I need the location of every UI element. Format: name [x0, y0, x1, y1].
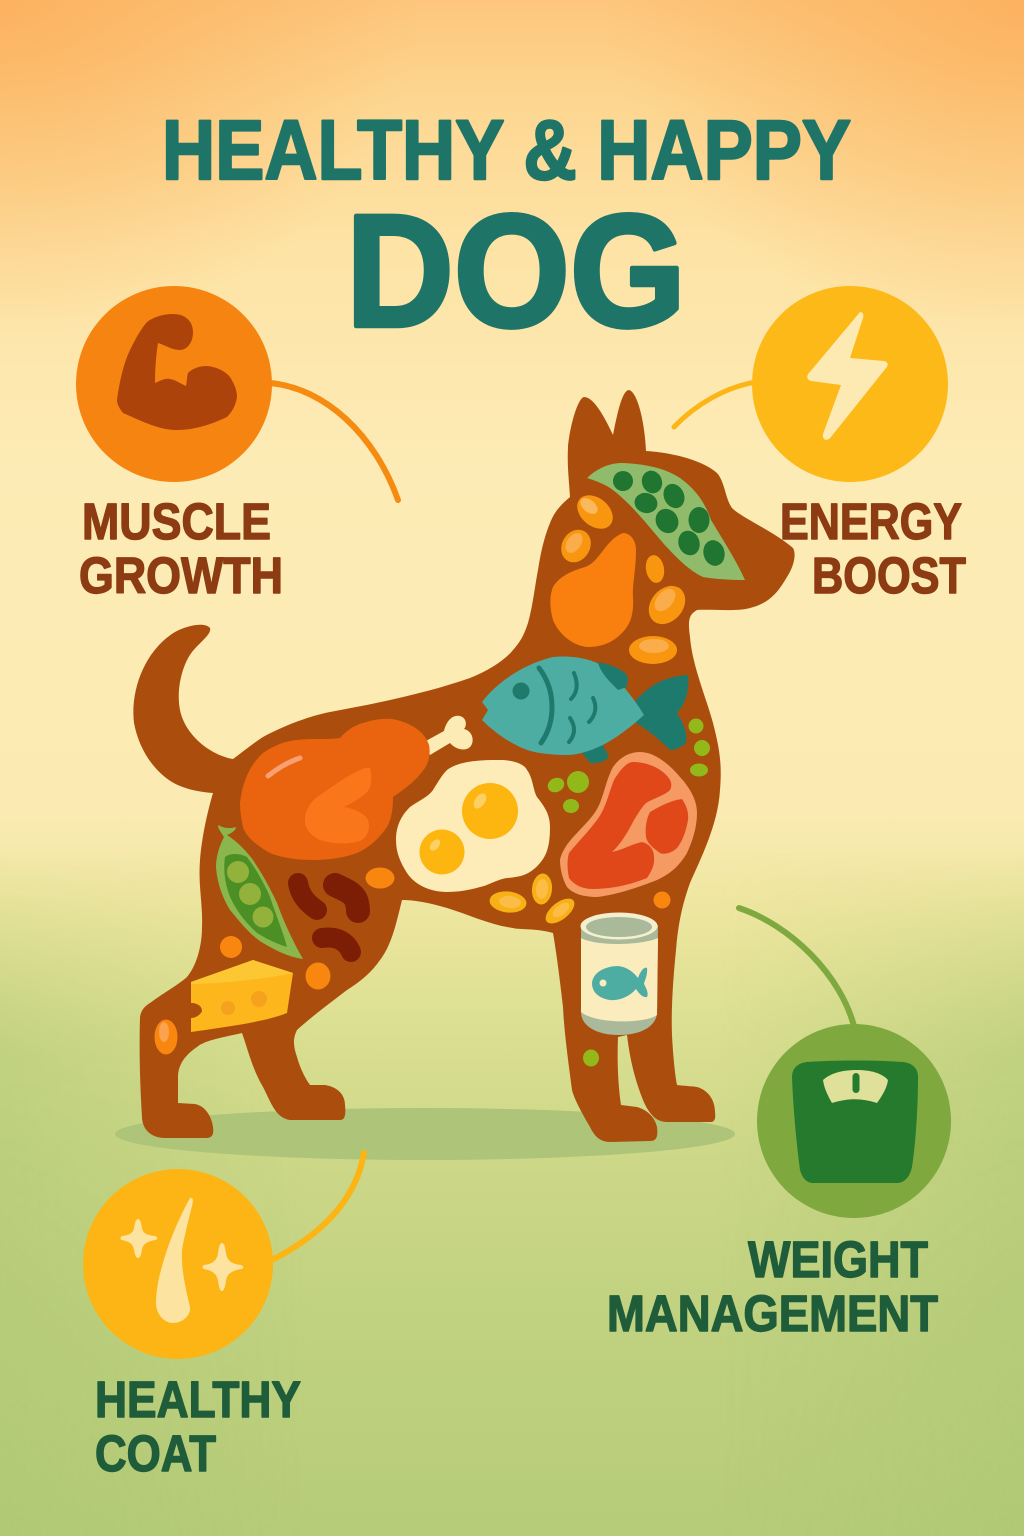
yellow kibble, belly: [489, 873, 670, 928]
steak: [560, 752, 697, 897]
orange pieces, rear: [154, 868, 394, 1054]
green pea pod, rear: [216, 825, 303, 959]
chicken drumstick: [240, 716, 473, 860]
green dots, chest: [545, 718, 710, 813]
icon: lightning bolt: [807, 312, 888, 440]
fried egg: [396, 760, 550, 892]
dog with food inside: [133, 390, 795, 1142]
label: ENERGY: [780, 493, 962, 550]
icon circle: [83, 1169, 273, 1359]
connector: [739, 908, 855, 1030]
kidney beans: [298, 883, 358, 952]
callout: energy boost: BOOST: [812, 547, 966, 604]
label: MUSCLE: [82, 493, 271, 550]
icon: hair strand: [156, 1198, 193, 1323]
callout: energy boost: [674, 286, 966, 604]
title line: Healthy & Happy: HEALTHY & HAPPY: [162, 103, 851, 197]
connector: [270, 383, 398, 500]
pea pod on head: [587, 463, 745, 580]
callout: weight management: MANAGEMENT: [607, 1285, 938, 1342]
fish: [482, 657, 688, 763]
icon circle: [76, 286, 272, 482]
callout: healthy coat: COAT: [95, 1425, 216, 1482]
icon: flexed arm: [117, 314, 237, 430]
callout: healthy coat: [83, 1153, 364, 1482]
canned food: [580, 912, 658, 1035]
callout: weight management: [607, 908, 951, 1342]
green dot, front leg: [583, 1050, 599, 1066]
title line: Dog: DOG: [346, 181, 686, 360]
callout: muscle growth: [76, 286, 398, 604]
cheese wedge: [191, 960, 293, 1032]
icon: sparkle left: [120, 1219, 157, 1258]
dog silhouette: [133, 390, 795, 1142]
ground shadow: [115, 1108, 735, 1160]
icon: sparkle right: [202, 1243, 243, 1291]
icon circle: [757, 1024, 951, 1218]
callout: muscle growth: GROWTH: [79, 547, 283, 604]
title: [162, 103, 851, 360]
label: HEALTHY: [95, 1371, 301, 1428]
icon circle: [752, 286, 948, 482]
connector: [272, 1153, 364, 1260]
kibble pieces, neck: [555, 488, 693, 664]
orange liver blob: [550, 533, 636, 647]
connector: [674, 382, 756, 427]
icon: weighing scale: [792, 1060, 918, 1183]
bone: [424, 716, 473, 755]
label: WEIGHT: [748, 1231, 928, 1288]
